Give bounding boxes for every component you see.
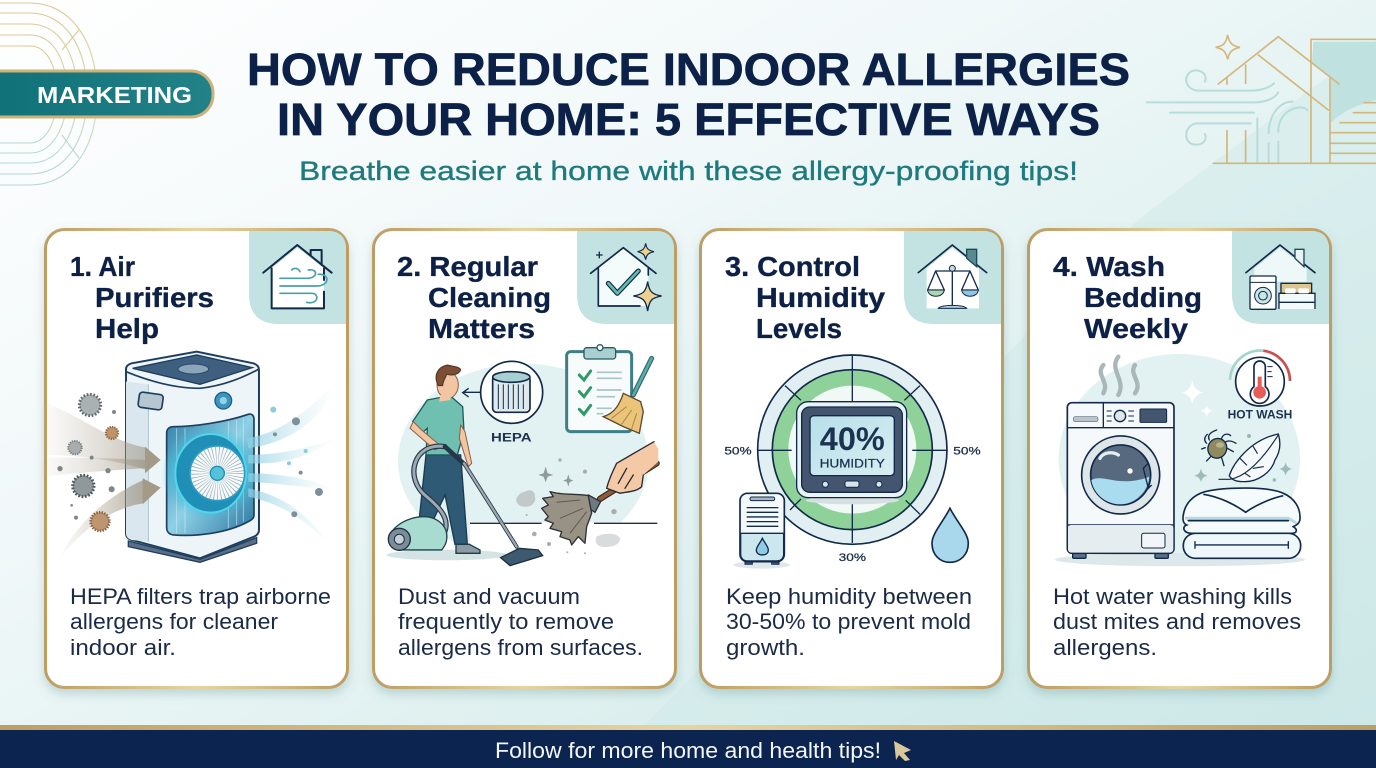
heading 3: Levels <box>756 313 842 344</box>
steam <box>1101 357 1138 395</box>
illustration: man vacuuming and dusting <box>387 345 660 566</box>
footer bar <box>0 725 1376 768</box>
heading 2 <box>397 251 551 344</box>
heading 1: Help <box>95 313 159 344</box>
panel: 4 wash bedding <box>1028 230 1330 688</box>
corner tab 4 <box>1232 231 1329 324</box>
corner tab 2 <box>577 231 674 324</box>
corner tab 1 <box>249 231 346 324</box>
description 2: frequently to remove <box>398 609 614 634</box>
heading 3: 3. Control <box>725 251 860 282</box>
description 2 <box>398 584 643 660</box>
card frame 1 <box>46 230 348 688</box>
heading 2: 2. Regular <box>397 251 538 282</box>
description 3: Keep humidity between <box>726 584 972 609</box>
hot wash thermometer <box>1228 351 1292 422</box>
title <box>247 44 1130 145</box>
category badge: marketing: MARKETING <box>37 82 192 108</box>
gauge labels <box>724 445 981 564</box>
HEPA filter callout: HEPA <box>491 430 532 444</box>
dust mite <box>1202 430 1236 466</box>
panel: 3 control humidity <box>700 230 1002 688</box>
heading 1: 1. Air <box>70 251 135 282</box>
digital display: 40% <box>820 421 885 457</box>
gauge labels: 30% <box>839 552 866 564</box>
heading 4: Weekly <box>1084 313 1188 344</box>
dust specks <box>516 458 620 554</box>
purifier body <box>126 352 259 558</box>
illustration: humidity gauge <box>724 355 981 569</box>
icon: house with washer and bed <box>1246 245 1315 309</box>
panel: 1 air purifiers <box>42 230 347 688</box>
filter window <box>167 414 254 535</box>
incoming dirty air arrows <box>42 402 161 558</box>
heading 4 <box>1053 251 1202 344</box>
title: IN YOUR HOME: 5 EFFECTIVE WAYS <box>277 94 1100 145</box>
description 1 <box>70 584 331 660</box>
description 4 <box>1053 584 1301 660</box>
description 1: allergens for cleaner <box>70 609 278 634</box>
heading 1: Purifiers <box>95 282 214 313</box>
description 4: dust mites and removes <box>1053 609 1301 634</box>
heading 4: 4. Wash <box>1053 251 1165 282</box>
digital display <box>797 402 907 504</box>
panel: 2 regular cleaning <box>374 230 676 688</box>
heading 2: Cleaning <box>428 282 551 313</box>
description 4: Hot water washing kills <box>1053 584 1292 609</box>
corner tab 3 <box>904 231 1001 324</box>
footer bar: Follow for more home and health tips! <box>495 738 881 763</box>
dehumidifier <box>733 493 790 569</box>
description 4: allergens. <box>1053 635 1157 660</box>
icon: house with air <box>263 245 332 308</box>
description 3: 30-50% to prevent mold <box>726 609 971 634</box>
gauge rings <box>758 355 947 544</box>
pale backdrop <box>398 364 649 558</box>
clipboard checklist <box>567 345 652 433</box>
heading 4: Bedding <box>1084 282 1202 313</box>
washing machine <box>1067 403 1174 558</box>
icon: cursor arrow <box>894 741 911 761</box>
vacuum <box>388 446 543 566</box>
folded bedding <box>1183 488 1301 558</box>
category badge: marketing <box>0 71 213 117</box>
HEPA filter callout <box>463 361 543 444</box>
card frame 2 <box>374 230 676 688</box>
decorative concentric arcs top left <box>0 3 97 185</box>
description 1: indoor air. <box>70 635 176 660</box>
outgoing clean air <box>247 385 337 542</box>
card frame 4 <box>1028 230 1330 688</box>
particles <box>57 394 323 531</box>
gauge labels: 50% <box>953 445 981 457</box>
illustration: air purifier <box>126 352 259 562</box>
icon: house with check <box>591 243 662 311</box>
icon: house with scales <box>918 245 987 308</box>
digital display: HUMIDITY <box>820 456 885 470</box>
person <box>410 365 480 553</box>
feather <box>1219 434 1280 482</box>
title: HOW TO REDUCE INDOOR ALLERGIES <box>247 44 1130 95</box>
pale backdrop <box>1059 354 1300 564</box>
gauge labels: 50% <box>724 445 752 457</box>
heading 3 <box>725 251 885 344</box>
description 2: Dust and vacuum <box>398 584 580 609</box>
description 3 <box>726 584 972 660</box>
description 3: growth. <box>726 635 805 660</box>
card frame 3 <box>700 230 1002 688</box>
hand with feather duster <box>542 442 658 545</box>
sparkles <box>1182 380 1213 418</box>
heading 3: Humidity <box>756 282 885 313</box>
illustration: washing machine and bedding <box>1055 351 1305 566</box>
heading 2: Matters <box>428 313 535 344</box>
subtitle: Breathe easier at home with these allergy-proofing tips! <box>299 156 1078 186</box>
description 1: HEPA filters trap airborne <box>70 584 331 609</box>
description 2: allergens from surfaces. <box>398 635 643 660</box>
decorative house line art top right <box>1147 35 1376 163</box>
hot wash thermometer: HOT WASH <box>1228 409 1292 422</box>
water drop <box>932 508 968 562</box>
heading 1 <box>70 251 214 344</box>
